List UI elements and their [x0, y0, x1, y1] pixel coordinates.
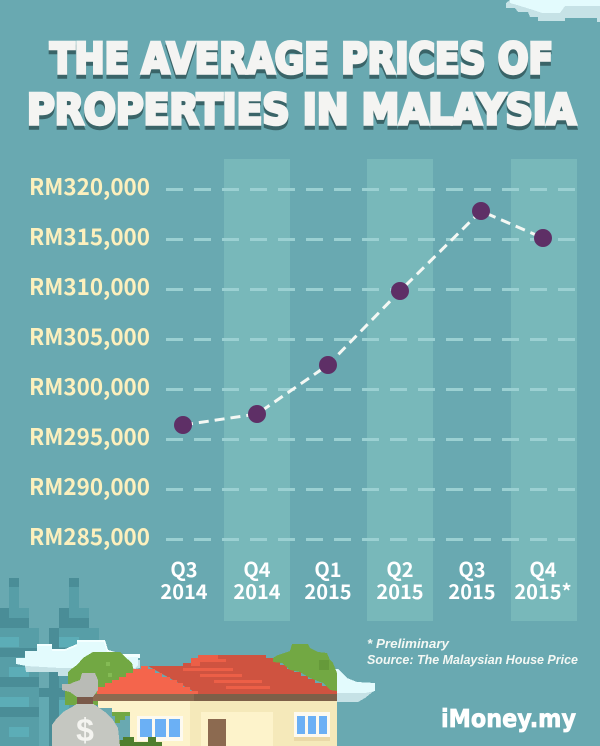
footnote: * Preliminary	[367, 637, 450, 651]
x axis labels: 2014	[233, 576, 281, 605]
x axis labels: 2015*	[514, 576, 572, 605]
icon: right tree	[273, 644, 337, 691]
x axis labels: Q3	[170, 554, 198, 583]
grid lines	[166, 190, 577, 540]
x axis labels	[160, 554, 572, 605]
eave	[90, 694, 337, 701]
y axis labels: RM290,000	[29, 468, 150, 502]
left window	[137, 716, 183, 741]
y axis labels: RM305,000	[29, 318, 150, 352]
y axis labels: RM320,000	[29, 168, 150, 202]
y axis labels: RM310,000	[29, 268, 150, 302]
x axis labels: Q3	[458, 554, 486, 583]
icon: small leaves	[112, 712, 162, 746]
x axis labels: Q1	[314, 554, 342, 583]
line chart	[174, 202, 552, 434]
x axis labels: 2015	[304, 576, 352, 605]
x axis labels: 2014	[160, 576, 208, 605]
walls	[98, 701, 194, 746]
roof	[97, 655, 337, 694]
x axis labels: 2015	[376, 576, 424, 605]
icon: house	[90, 655, 337, 746]
chart background bands	[224, 159, 577, 621]
icon: left cloud	[16, 640, 140, 676]
right window	[294, 712, 330, 741]
x axis labels: Q4	[243, 554, 271, 583]
y axis labels	[29, 168, 150, 552]
icon: left tree	[65, 652, 134, 705]
x axis labels: Q4	[529, 554, 557, 583]
footnote: Source: The Malaysian House Price	[367, 653, 578, 667]
y axis labels: RM285,000	[29, 518, 150, 552]
footnote	[367, 637, 578, 667]
icon: money bag	[52, 673, 120, 746]
x axis labels: 2015	[448, 576, 496, 605]
logo: iMoney.my	[441, 704, 576, 733]
icon: pixel towers	[0, 578, 99, 746]
icon: right cloud	[333, 669, 375, 702]
y axis labels: RM300,000	[29, 368, 150, 402]
title	[27, 34, 576, 138]
x axis labels: Q2	[386, 554, 414, 583]
door	[208, 719, 226, 746]
y axis labels: RM295,000	[29, 418, 150, 452]
icon: top right cloud	[506, 0, 600, 22]
y axis labels: RM315,000	[29, 218, 150, 252]
